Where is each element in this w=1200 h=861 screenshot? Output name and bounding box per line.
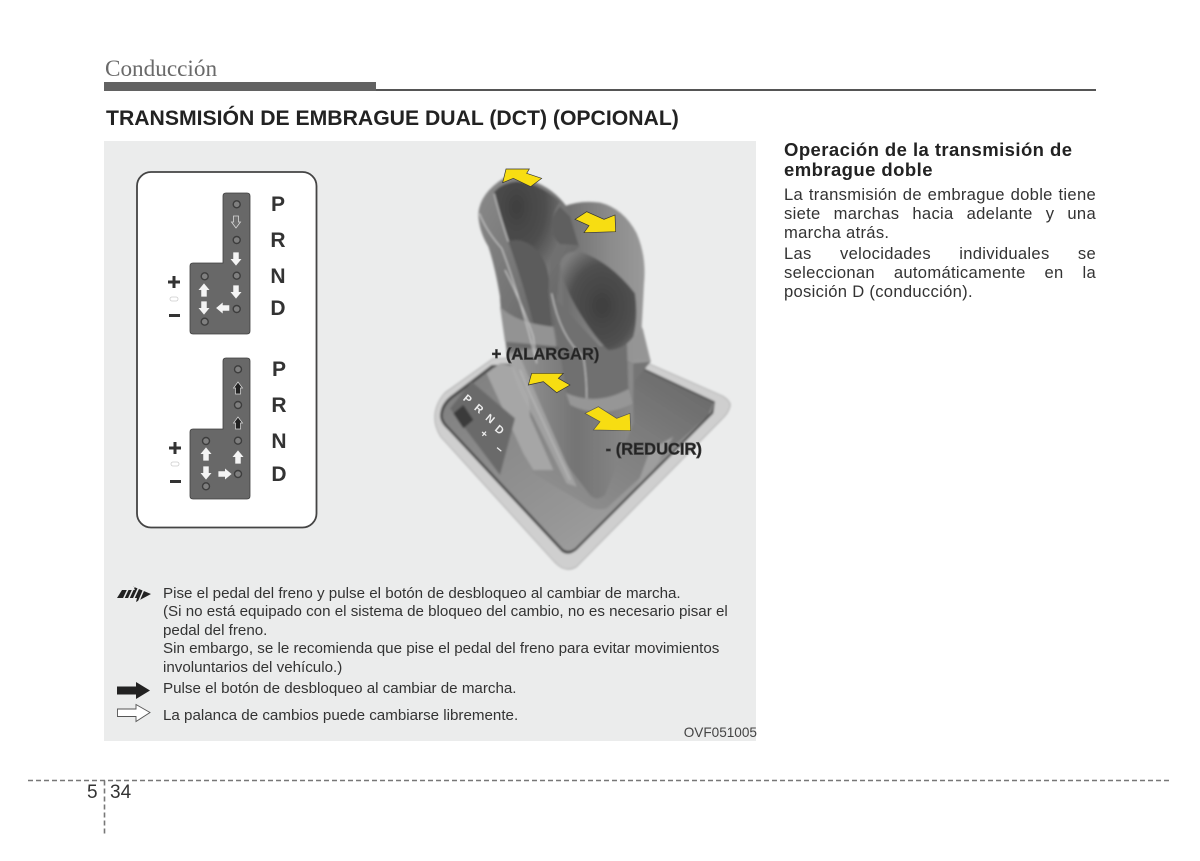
section header: Conducción bbox=[104, 56, 1096, 91]
plate letters: + bbox=[477, 428, 490, 441]
yellow arrow: back, rear position bbox=[575, 212, 616, 233]
lower gate: shift from D: D bbox=[271, 463, 287, 486]
front knob dark top bbox=[560, 251, 636, 350]
rear ghost knob bbox=[563, 202, 651, 363]
side heading: Operación de la transmisión de bbox=[784, 139, 1072, 160]
lower gate: shift from D: P bbox=[272, 358, 286, 381]
upper gate: shift to D: D bbox=[270, 297, 286, 320]
legend text: unlock button: Pulse el botón de desbloqueo al cambiar de marcha. bbox=[163, 680, 517, 697]
section name: Conducción bbox=[105, 56, 217, 82]
front stem bbox=[548, 292, 628, 399]
yellow arrow: forward, rear position bbox=[503, 169, 542, 187]
label: + (ALARGAR): + (ALARGAR) bbox=[492, 346, 599, 364]
shift pattern plate bbox=[450, 382, 515, 475]
right stem fold bbox=[633, 328, 651, 362]
lower gate: shift from D: R bbox=[271, 394, 287, 417]
body paragraph: siete marchas hacia adelante y una bbox=[784, 204, 1096, 223]
boot bbox=[507, 343, 633, 498]
legend text: brake and button bbox=[163, 585, 728, 676]
legend text: brake and button: pedal del freno. bbox=[163, 622, 267, 639]
plate letters: P bbox=[460, 393, 474, 407]
lower gate: shift from D: N bbox=[271, 430, 287, 453]
plate letters: R bbox=[472, 402, 485, 416]
dashed rules bbox=[28, 780, 1169, 834]
legend: solid arrow icon bbox=[117, 682, 150, 699]
forward knob dark top bbox=[493, 182, 560, 283]
yellow arrow: forward, lower bbox=[528, 373, 570, 393]
plate letters bbox=[460, 393, 506, 457]
body paragraph: Las velocidades individuales se bbox=[784, 244, 1096, 263]
upper gate: shift to D: N bbox=[270, 265, 286, 288]
side heading: embrague doble bbox=[784, 159, 933, 180]
highlight lines bbox=[479, 193, 587, 398]
page number: 34 bbox=[110, 782, 131, 803]
boot collar bbox=[566, 388, 633, 412]
body paragraph bbox=[784, 185, 1096, 301]
body paragraph: La transmisión de embrague doble tiene bbox=[784, 185, 1096, 204]
page footer bbox=[28, 780, 1169, 834]
legend text: free shift: La palanca de cambios puede cambiarse libremente. bbox=[163, 707, 518, 724]
forward knob body bbox=[478, 177, 579, 350]
plate letters: N bbox=[483, 412, 497, 426]
panel: gear shift diagram bbox=[104, 141, 756, 741]
side heading bbox=[784, 139, 1072, 180]
upper gate: shift to D bbox=[168, 193, 286, 334]
stem backing bbox=[500, 250, 651, 403]
gate diagrams card bbox=[136, 171, 318, 528]
legend: outline arrow icon bbox=[117, 704, 151, 722]
body paragraph: seleccionan automáticamente en la bbox=[784, 263, 1096, 282]
lower gate: shift from D bbox=[169, 358, 287, 499]
chapter number: 5 bbox=[87, 782, 98, 803]
legend text: brake and button: Pise el pedal del freno y pulse el botón de desbloqueo al cambiar de marcha. bbox=[163, 585, 681, 602]
legend text: brake and button: involuntarios del vehículo.) bbox=[163, 659, 342, 676]
body paragraph: marcha atrás. bbox=[784, 223, 889, 242]
OVF code: OVF051005 bbox=[684, 725, 757, 740]
legend: hatched arrow icon bbox=[117, 586, 151, 602]
label: - (REDUCIR): - (REDUCIR) bbox=[606, 440, 702, 458]
legend text: brake and button: Sin embargo, se le recomienda que pise el pedal del freno para evitar movimientos bbox=[163, 640, 719, 657]
yellow arrow: back, lower bbox=[585, 407, 631, 431]
plate letters: − bbox=[492, 443, 505, 457]
plate letters: D bbox=[492, 423, 506, 437]
main heading: TRANSMISIÓN DE EMBRAGUE DUAL (DCT) (OPCIONAL) bbox=[106, 107, 679, 130]
upper gate: shift to D: P bbox=[271, 193, 285, 216]
upper gate: shift to D: R bbox=[270, 229, 286, 252]
legend text: brake and button: (Si no está equipado con el sistema de bloqueo del cambio, no es necesario pisar el bbox=[163, 603, 728, 620]
gear shifter illustration bbox=[433, 168, 732, 571]
console base bbox=[435, 358, 730, 569]
body paragraph: posición D (conducción). bbox=[784, 282, 973, 301]
header bar bbox=[104, 82, 1096, 91]
